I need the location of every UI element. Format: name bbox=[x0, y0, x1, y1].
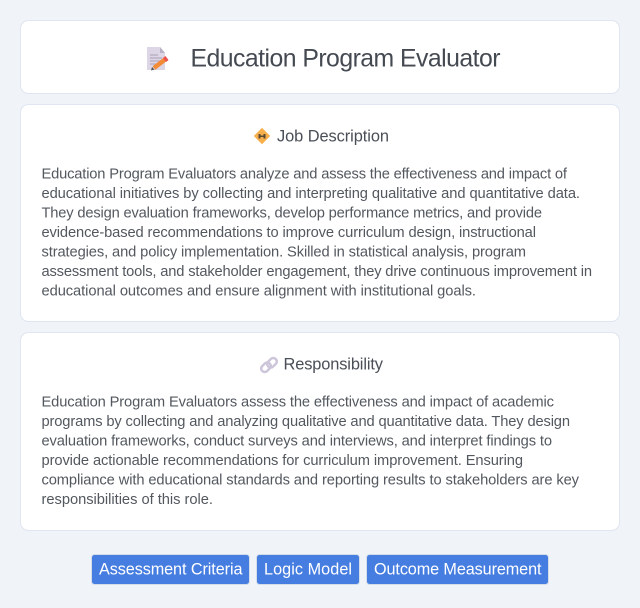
text block: job description bbox=[42, 166, 592, 299]
panel: title header bbox=[20, 20, 620, 94]
tag: assessment criteria bbox=[92, 554, 250, 584]
icon: diamond sign bbox=[254, 128, 270, 144]
panel: responsibility bbox=[20, 332, 620, 530]
text block: responsibility: programs by collecting and analyzing qualitative and quantitative data. They design bbox=[42, 414, 570, 430]
icon: chain link bbox=[260, 357, 278, 373]
icon: document with pencil bbox=[147, 47, 167, 70]
tag: outcome measurement bbox=[366, 554, 548, 584]
heading: job description: Job Description bbox=[277, 128, 389, 146]
heading: responsibility: Responsibility bbox=[284, 356, 384, 374]
title: Education Program Evaluator bbox=[190, 46, 500, 72]
tag: outcome measurement: Outcome Measurement bbox=[374, 560, 542, 578]
tag: logic model: Logic Model bbox=[264, 560, 352, 578]
text block: responsibility: provide actionable recommendations for curriculum improvement. Ensuring bbox=[42, 453, 523, 469]
text block: job description: assessment tools, and stakeholder engagement, they drive continuous improvement in bbox=[42, 264, 592, 280]
text block: responsibility: responsibilities of this role. bbox=[42, 492, 213, 508]
text block: job description: educational initiatives by collecting and interpreting qualitative and quantitative data. bbox=[42, 186, 580, 202]
text block: job description: evidence-based recommendations to improve curriculum design, instructional bbox=[42, 225, 536, 241]
tag: logic model bbox=[256, 554, 360, 584]
text block: job description: strategies, and policy implementation. Skilled in statistical analysis, program bbox=[42, 244, 526, 260]
text block: job description: educational outcomes and ensure alignment with institutional goals. bbox=[42, 283, 476, 299]
panel: job description bbox=[20, 104, 620, 322]
text block: responsibility: compliance with educational standards and reporting results to stakeholders are key bbox=[42, 472, 580, 488]
text block: responsibility: Education Program Evaluators assess the effectiveness and impact of academic bbox=[42, 394, 554, 410]
text block: responsibility: evaluation frameworks, conduct surveys and interviews, and interpret findings to bbox=[42, 433, 552, 449]
tag: assessment criteria: Assessment Criteria bbox=[99, 560, 242, 578]
text block: job description: They design evaluation frameworks, develop performance metrics, and provide bbox=[42, 205, 542, 221]
text block: responsibility bbox=[42, 394, 580, 508]
text block: job description: Education Program Evaluators analyze and assess the effectiveness and impact of bbox=[42, 166, 568, 182]
